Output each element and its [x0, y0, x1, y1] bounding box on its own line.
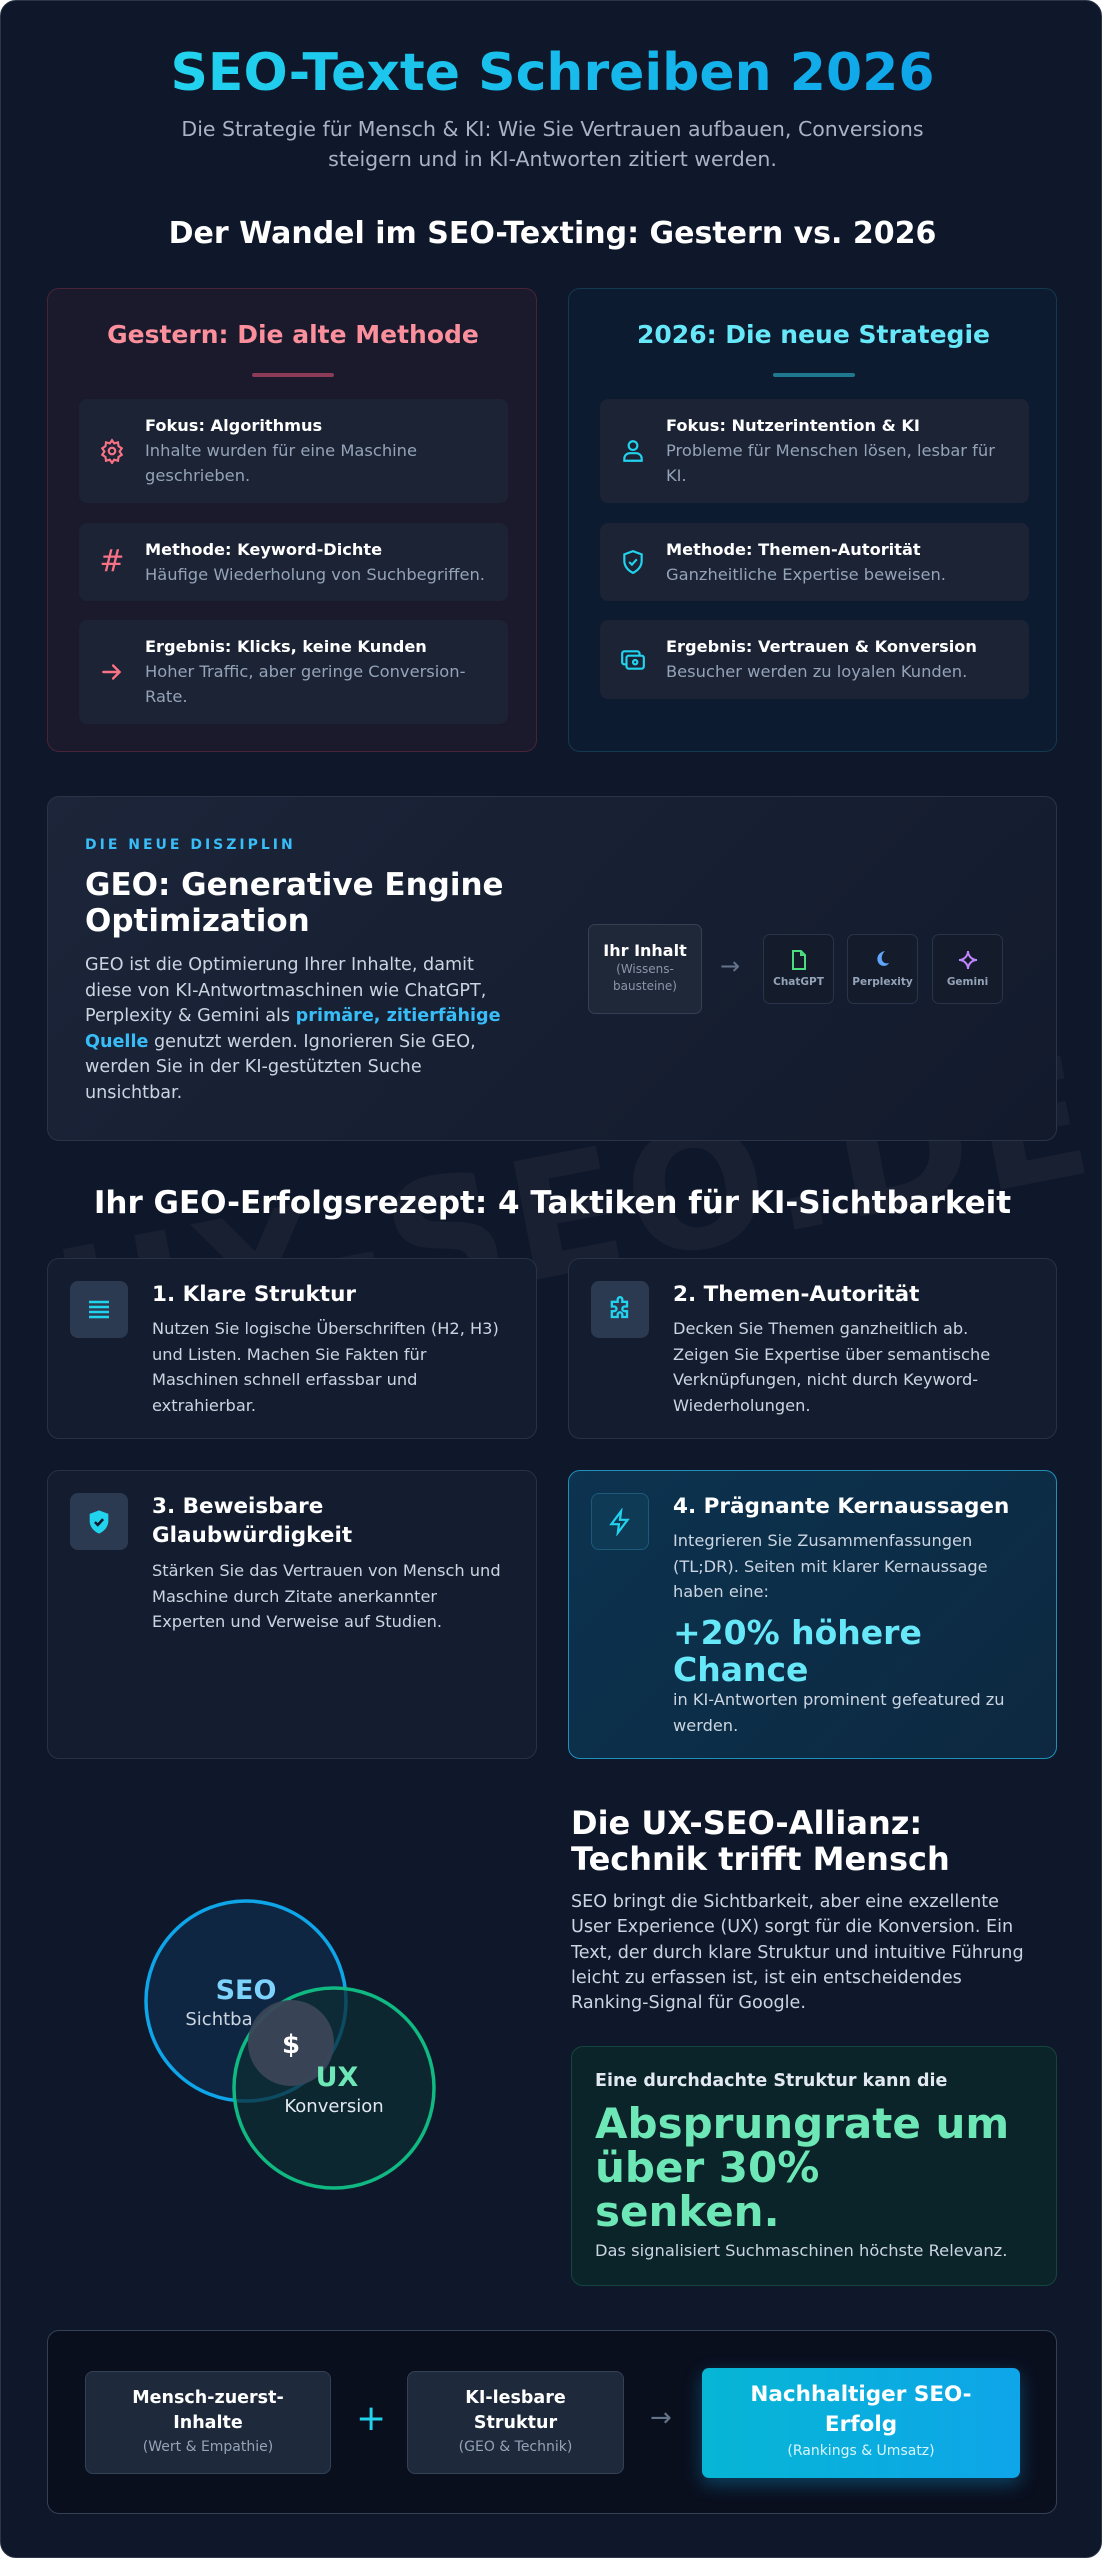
item: user intent: Fokus: Nutzerintention & KI: [666, 416, 920, 435]
venn diagram: SEO: [216, 1975, 276, 2006]
box: AI readable: KI-lesbare: [465, 2388, 566, 2408]
icon: Perplexity: Perplexity: [852, 976, 913, 988]
box: human first: Inhalte: [173, 2413, 243, 2433]
box: AI readable: [407, 2371, 624, 2474]
panel: old method: [47, 288, 537, 752]
icon: Gemini: Gemini: [947, 976, 988, 988]
box: success: Nachhaltiger SEO-: [750, 2382, 972, 2407]
tactic 2: [568, 1258, 1057, 1439]
tactic 4: in KI-Antworten prominent gefeatured zu werden.: [673, 1690, 1005, 1734]
item: focus algorithm: [79, 399, 508, 503]
icon: bolt: [591, 1493, 649, 1550]
callout: bounce rate: Absprungrate um: [595, 2099, 1009, 2148]
plus: +: [356, 2398, 386, 2439]
box: your content: bausteine): [613, 979, 677, 993]
item: clicks no customers: [79, 620, 508, 724]
item: trust conversion: Ergebnis: Vertrauen & Konversion: [666, 637, 977, 656]
item: user intent: Probleme für Menschen lösen, lesbar für KI.: [666, 441, 995, 485]
box: AI readable: (GEO & Technik): [459, 2439, 572, 2455]
tactic 3: 3. Beweisbare Glaubwürdigkeit: [152, 1494, 352, 1548]
arrow: →: [720, 952, 740, 980]
item: focus algorithm: Fokus: Algorithmus: [145, 416, 322, 435]
icon: Gemini: [932, 934, 1003, 1004]
box: human first: Mensch-zuerst-: [132, 2388, 284, 2408]
watermark: UX-SEO.DE: [42, 1019, 1102, 1408]
icon: Perplexity: [847, 934, 918, 1004]
diagram: content to AI: [588, 924, 740, 1014]
item: user intent: [600, 399, 1029, 503]
icon: list: [70, 1281, 128, 1338]
heading: comparison: Der Wandel im SEO-Texting: Gestern vs. 2026: [169, 216, 936, 251]
icon: ChatGPT: ChatGPT: [773, 976, 824, 988]
box: human first: [85, 2371, 331, 2474]
box: human first: (Wert & Empathie): [143, 2439, 273, 2455]
tactic 3: Stärken Sie das Vertrauen von Mensch und Maschine durch Zitate anerkannter Experten und Verweise auf Studien.: [152, 1561, 501, 1631]
alliance text: SEO bringt die Sichtbarkeit, aber eine exzellente User Experience (UX) sorgt für die Konversion. Ein Text, der durch klare Struktur und intuitive Führung leicht zu erfassen ist, ist ein entscheidendes Ranking-Signal für Google.: [571, 1892, 1024, 2013]
icon: ChatGPT: [763, 934, 834, 1004]
tactic 4: 4. Prägnante Kernaussagen: [673, 1494, 1009, 1519]
callout: bounce rate: über 30%: [595, 2143, 819, 2192]
item: topic authority: Ganzheitliche Expertise beweisen.: [666, 565, 946, 584]
callout: bounce rate: Eine durchdachte Struktur kann die: [595, 2071, 947, 2091]
box: AI readable: Struktur: [474, 2413, 557, 2433]
tactic 2: Decken Sie Themen ganzheitlich ab. Zeigen Sie Expertise über semantische Verknüpfungen, nicht durch Keyword-Wiederholungen.: [673, 1319, 990, 1414]
stat: +20% höhere: [673, 1613, 922, 1652]
callout: bounce rate: [571, 2046, 1057, 2286]
icon: puzzle: [591, 1281, 649, 1338]
panel heading: Gestern: Die alte Methode: [107, 320, 479, 349]
tactic 2: 2. Themen-Autorität: [673, 1282, 919, 1307]
venn diagram: UX: [316, 2062, 359, 2093]
tactic 4: [568, 1470, 1057, 1759]
box: success: Erfolg: [825, 2412, 897, 2437]
GEO body: GEO ist die Optimierung Ihrer Inhalte, damit diese von KI-Antwortmaschinen wie ChatGPT, Perplexity & Gemini als primäre, zitierfähige Quelle genutzt werden. Ignorieren Sie GEO, werden Sie in der KI-gestützten Suche unsichtbar.: [85, 955, 501, 1102]
callout: bounce rate: senken.: [595, 2187, 780, 2236]
box: success: [702, 2368, 1020, 2478]
box: your content: (Wissens-: [616, 962, 674, 976]
callout: bounce rate: Das signalisiert Suchmaschinen höchste Relevanz.: [595, 2241, 1007, 2260]
item: focus algorithm: Inhalte wurden für eine Maschine geschrieben.: [145, 441, 417, 485]
tactic 3: [47, 1470, 537, 1759]
item: keyword density: #: [99, 544, 125, 579]
item: trust conversion: Besucher werden zu loyalen Kunden.: [666, 662, 967, 681]
item: topic authority: [600, 523, 1029, 601]
venn diagram: $: [282, 2030, 300, 2060]
item: keyword density: [79, 523, 508, 601]
item: trust conversion: [600, 620, 1029, 699]
panel: GEO: [47, 796, 1057, 1141]
GEO heading: GEO: Generative Engine Optimization: [85, 867, 504, 939]
title: SEO-Texte Schreiben 2026: [170, 43, 935, 103]
heading: tactics: Ihr GEO-Erfolgsrezept: 4 Taktiken für KI-Sichtbarkeit: [94, 1185, 1011, 1221]
item: clicks no customers: Ergebnis: Klicks, keine Kunden: [145, 637, 427, 656]
stat: [673, 1613, 922, 1689]
icon: shield: [70, 1493, 128, 1550]
box: your content: [588, 924, 702, 1014]
arrow: →: [650, 2403, 672, 2433]
tactic 1: [47, 1258, 537, 1439]
panel: formula: [47, 2330, 1057, 2514]
venn diagram: [144, 1899, 436, 2190]
item: topic authority: Methode: Themen-Autorität: [666, 540, 921, 559]
tactic 1: 1. Klare Struktur: [152, 1282, 356, 1307]
item: keyword density: Methode: Keyword-Dichte: [145, 540, 382, 559]
tactic 1: Nutzen Sie logische Überschriften (H2, H3) und Listen. Machen Sie Fakten für Maschinen schnell erfassbar und extrahierbar.: [152, 1319, 499, 1414]
panel heading: 2026: Die neue Strategie: [637, 320, 990, 349]
subtitle: Die Strategie für Mensch & KI: Wie Sie Vertrauen aufbauen, Conversions steigern und in KI-Antworten zitiert werden.: [181, 117, 924, 171]
eyebrow: DIE NEUE DISZIPLIN: [85, 837, 296, 853]
box: success: (Rankings & Umsatz): [787, 2443, 935, 2459]
heading: UX-SEO alliance: Die UX-SEO-Allianz: Technik trifft Mensch: [571, 1804, 950, 1878]
stat: Chance: [673, 1650, 808, 1689]
box: your content: Ihr Inhalt: [603, 941, 687, 960]
venn diagram: Konversion: [284, 2096, 384, 2117]
item: keyword density: Häufige Wiederholung von Suchbegriffen.: [145, 565, 485, 584]
tactic 4: Integrieren Sie Zusammenfassungen (TL;DR). Seiten mit klarer Kernaussage haben eine:: [673, 1531, 988, 1601]
panel: new strategy: [568, 288, 1057, 752]
item: clicks no customers: Hoher Traffic, aber geringe Conversion-Rate.: [145, 662, 465, 706]
venn diagram: Sichtba: [185, 2009, 253, 2030]
